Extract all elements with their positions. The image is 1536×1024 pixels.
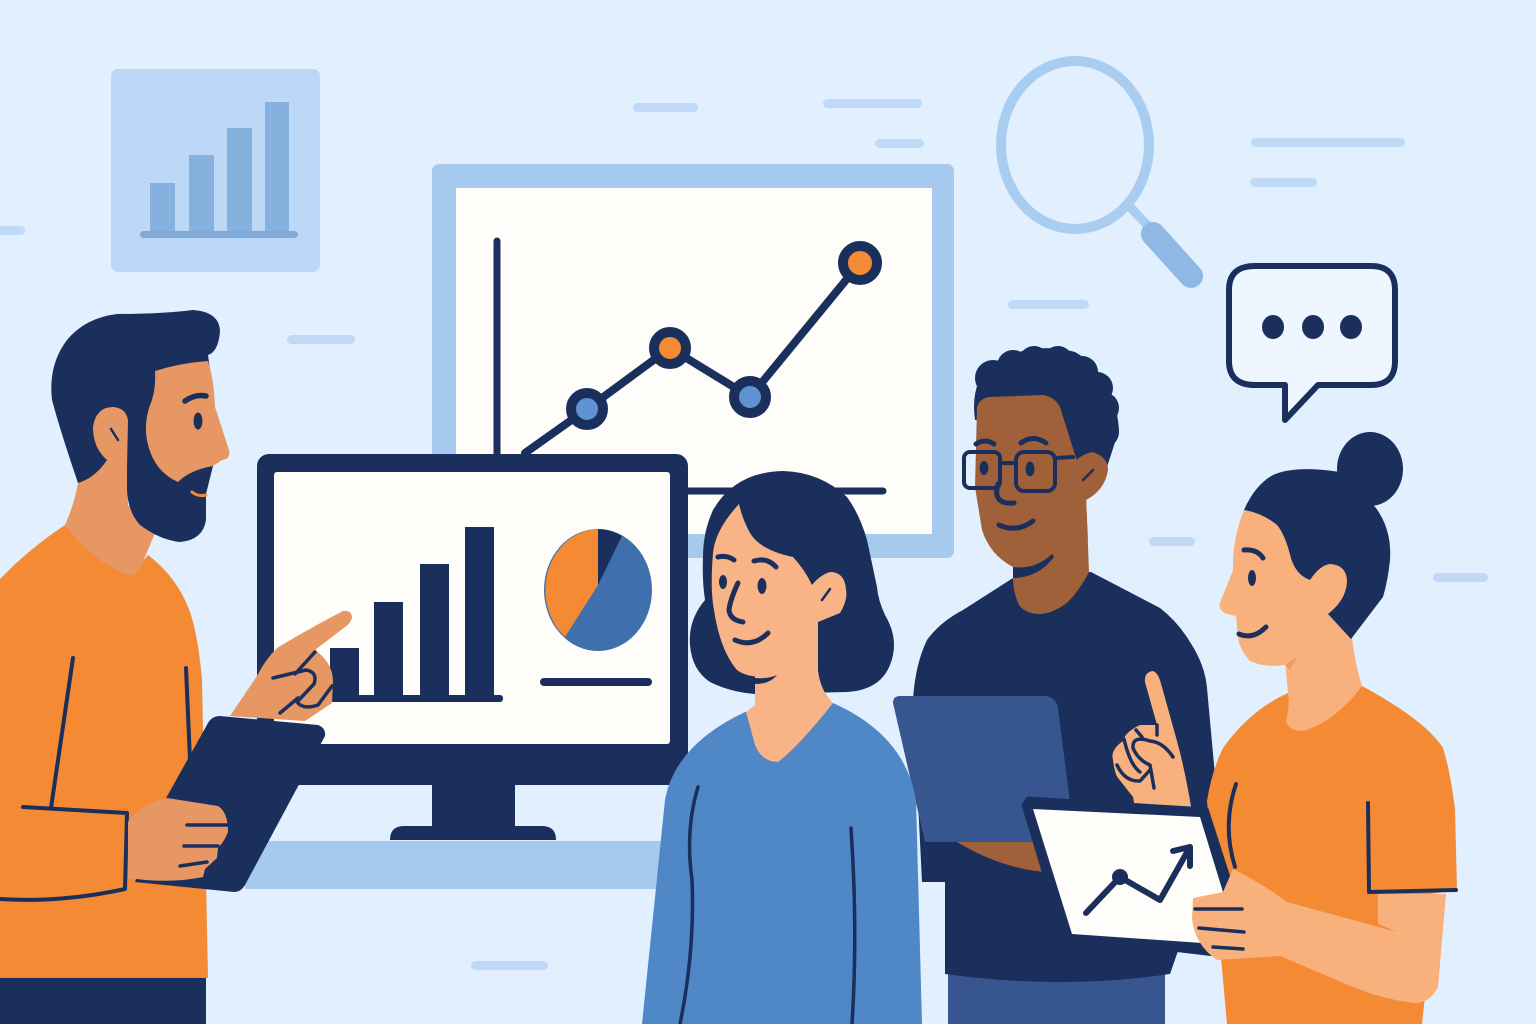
icon: bar chart tile (111, 69, 320, 272)
face (1220, 510, 1347, 666)
person: woman with bun (1023, 432, 1457, 1024)
navy shirt (913, 572, 1220, 982)
blue sweater (642, 700, 922, 1024)
monitor pie chart (544, 529, 652, 651)
blue tablet (893, 696, 1075, 842)
hair back (690, 471, 894, 694)
sleeve lines (1229, 784, 1456, 892)
white tablet with trend (1023, 798, 1233, 955)
person: woman in blue (642, 471, 922, 1024)
eye and eyebrow (194, 412, 202, 430)
sweater lines (680, 787, 855, 1024)
hair (1244, 469, 1390, 639)
neck (65, 460, 155, 575)
bun (1337, 432, 1403, 506)
hair (974, 346, 1119, 470)
facial features (1239, 550, 1266, 636)
computer monitor (257, 454, 688, 840)
sleeve lines (0, 658, 190, 900)
forearm (957, 842, 1045, 872)
neck (1285, 600, 1362, 731)
monitor bar chart (330, 527, 503, 702)
orange sweater (0, 525, 208, 978)
facial features (976, 438, 1093, 528)
icon: speech bubble (1229, 266, 1395, 420)
raised hand (1112, 671, 1192, 812)
person: man with beard (0, 310, 352, 1024)
desk (245, 841, 675, 889)
hair and beard (51, 310, 220, 542)
facial features (718, 556, 830, 643)
finger lines (1195, 909, 1244, 949)
chin shadow (755, 675, 777, 684)
holding hand (128, 798, 228, 881)
person: man with glasses (893, 346, 1220, 1024)
trousers (0, 970, 206, 1024)
glasses (964, 452, 1073, 491)
mouth (192, 492, 206, 496)
neck (1013, 495, 1089, 614)
arm and hand (1192, 869, 1446, 1003)
orange t-shirt (1207, 686, 1457, 1024)
neck (746, 620, 833, 762)
tablet (135, 716, 325, 892)
ear (1075, 452, 1108, 500)
trousers (948, 965, 1165, 1024)
pointing hand (230, 611, 352, 721)
icon: magnifying glass (1001, 61, 1191, 276)
face (975, 395, 1088, 570)
face (712, 504, 846, 677)
jaw shadow (1013, 554, 1054, 578)
presentation board with line chart (432, 164, 954, 558)
ear (93, 407, 128, 468)
face (146, 361, 229, 482)
